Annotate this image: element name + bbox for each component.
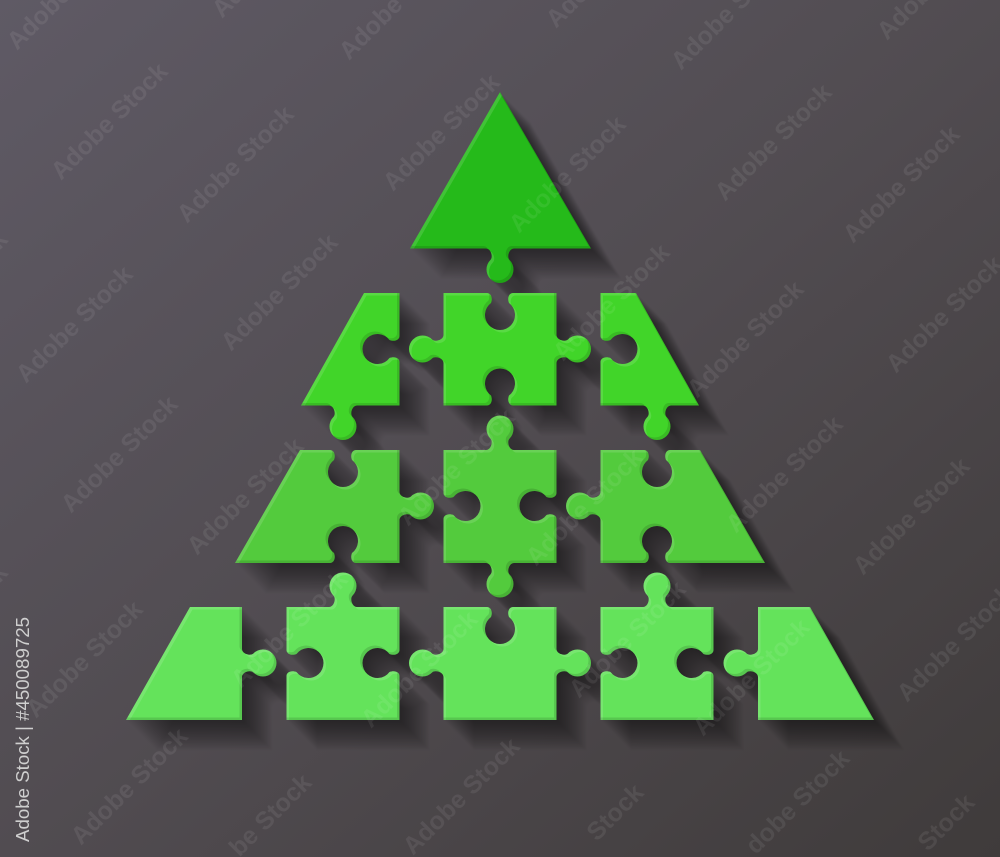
watermark pattern: Adobe Stock	[397, 732, 525, 857]
row 4: far left piece	[126, 607, 276, 720]
watermark pattern: Adobe Stock	[377, 68, 505, 196]
watermark pattern: Adobe Stock	[355, 605, 483, 733]
row 1: top triangle piece	[410, 92, 591, 283]
watermark pattern: Adobe Stock	[65, 722, 193, 850]
watermark pattern: Adobe Stock	[709, 78, 837, 206]
long diagonal shadows of the puzzle pieces	[128, 94, 904, 750]
watermark pattern: Adobe Stock	[563, 575, 691, 703]
row 2: centre piece	[409, 293, 591, 406]
watermark pattern: Adobe Stock	[171, 100, 299, 228]
watermark pattern: Adobe Stock	[520, 443, 648, 571]
watermark pattern: Stock	[581, 778, 649, 846]
watermark pattern: Adobe Stock	[720, 410, 848, 538]
watermark pattern: Adobe Stock	[687, 613, 815, 741]
watermark pattern: Adobe Stock	[10, 260, 138, 388]
row 3: left piece	[235, 450, 434, 563]
watermark pattern: Adobe Stock	[503, 110, 631, 238]
watermark pattern: Adobe Stock	[45, 57, 173, 185]
watermark pattern: Adobe Stock	[20, 595, 148, 723]
watermark pattern: Adobe Stock	[215, 228, 343, 356]
watermark pattern: Adobe Stock	[837, 120, 965, 248]
watermark pattern: Stock	[912, 788, 980, 856]
row 2: right piece	[600, 293, 699, 440]
watermark pattern: Adobe Stock	[181, 432, 309, 560]
row 3: centre piece	[444, 416, 556, 597]
watermark pattern: Adobe Stock	[55, 390, 183, 518]
watermark pattern: Adobe Stock	[681, 275, 809, 403]
row 4: second piece	[286, 573, 400, 720]
row 3: right piece	[566, 450, 765, 563]
watermark pattern: Adobe Stock	[547, 238, 675, 366]
vertical stock id text: Adobe Stock | #450089725	[13, 617, 33, 842]
watermark pattern: dobe Stock	[740, 744, 855, 857]
watermark pattern: Adobe Stock	[392, 403, 520, 531]
puzzle pyramid	[126, 92, 874, 720]
watermark pattern: Adobe Stock	[225, 565, 353, 693]
row 4: centre piece	[409, 607, 591, 720]
row 4: fourth piece	[600, 573, 714, 720]
row 4: far right piece	[724, 607, 874, 720]
row 2: left piece	[301, 293, 400, 440]
watermark pattern: Adobe Stock	[847, 452, 975, 580]
